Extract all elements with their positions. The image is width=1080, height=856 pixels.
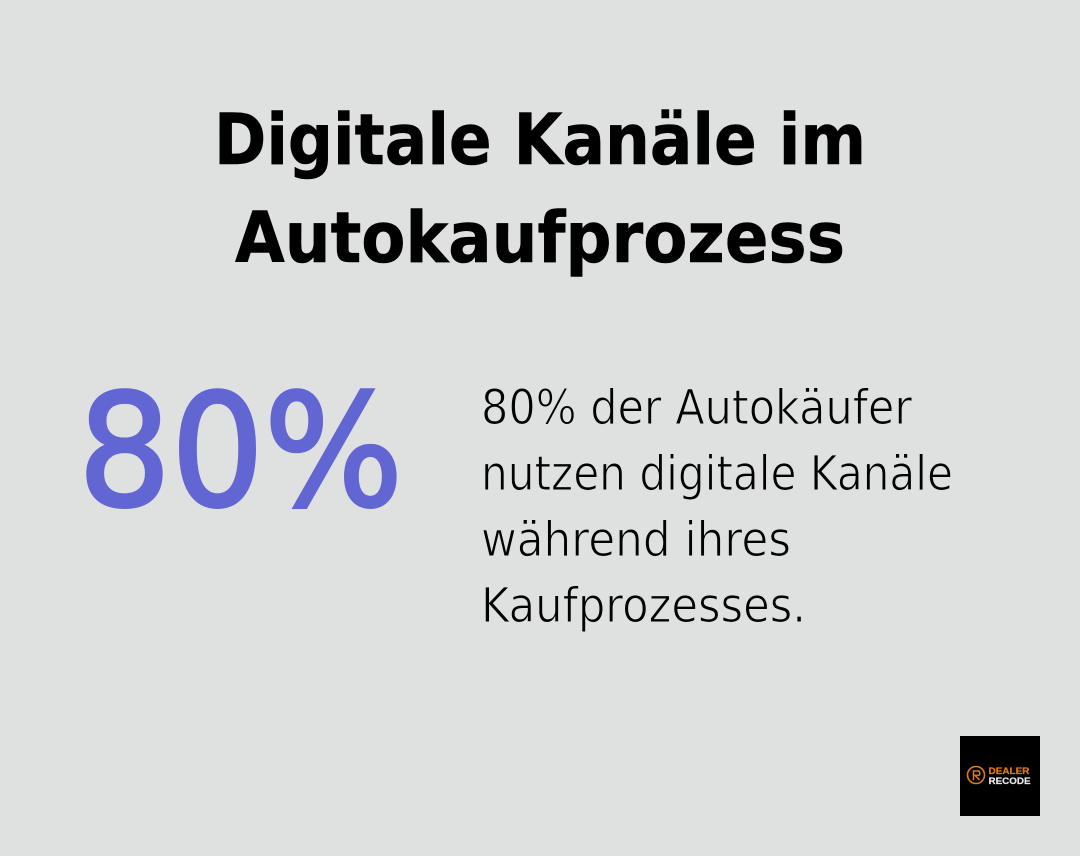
big number: 80%: 80% [78,361,403,542]
description text: nutzen digitale Kanäle [481,446,953,502]
title: Autokaufprozess [235,197,845,279]
description text: Kaufprozesses. [481,578,806,634]
title: Digitale Kanäle im [214,99,866,181]
description text: 80% der Autokäufer [481,380,912,436]
title [214,99,866,279]
logo icon [968,766,984,784]
logo wordmark [988,766,1030,786]
logo: Dealer Recode [960,736,1040,816]
description text: während ihres [481,512,791,568]
logo wordmark: RECODE [988,776,1030,786]
description text [481,380,953,634]
logo wordmark: DEALER [988,766,1030,776]
